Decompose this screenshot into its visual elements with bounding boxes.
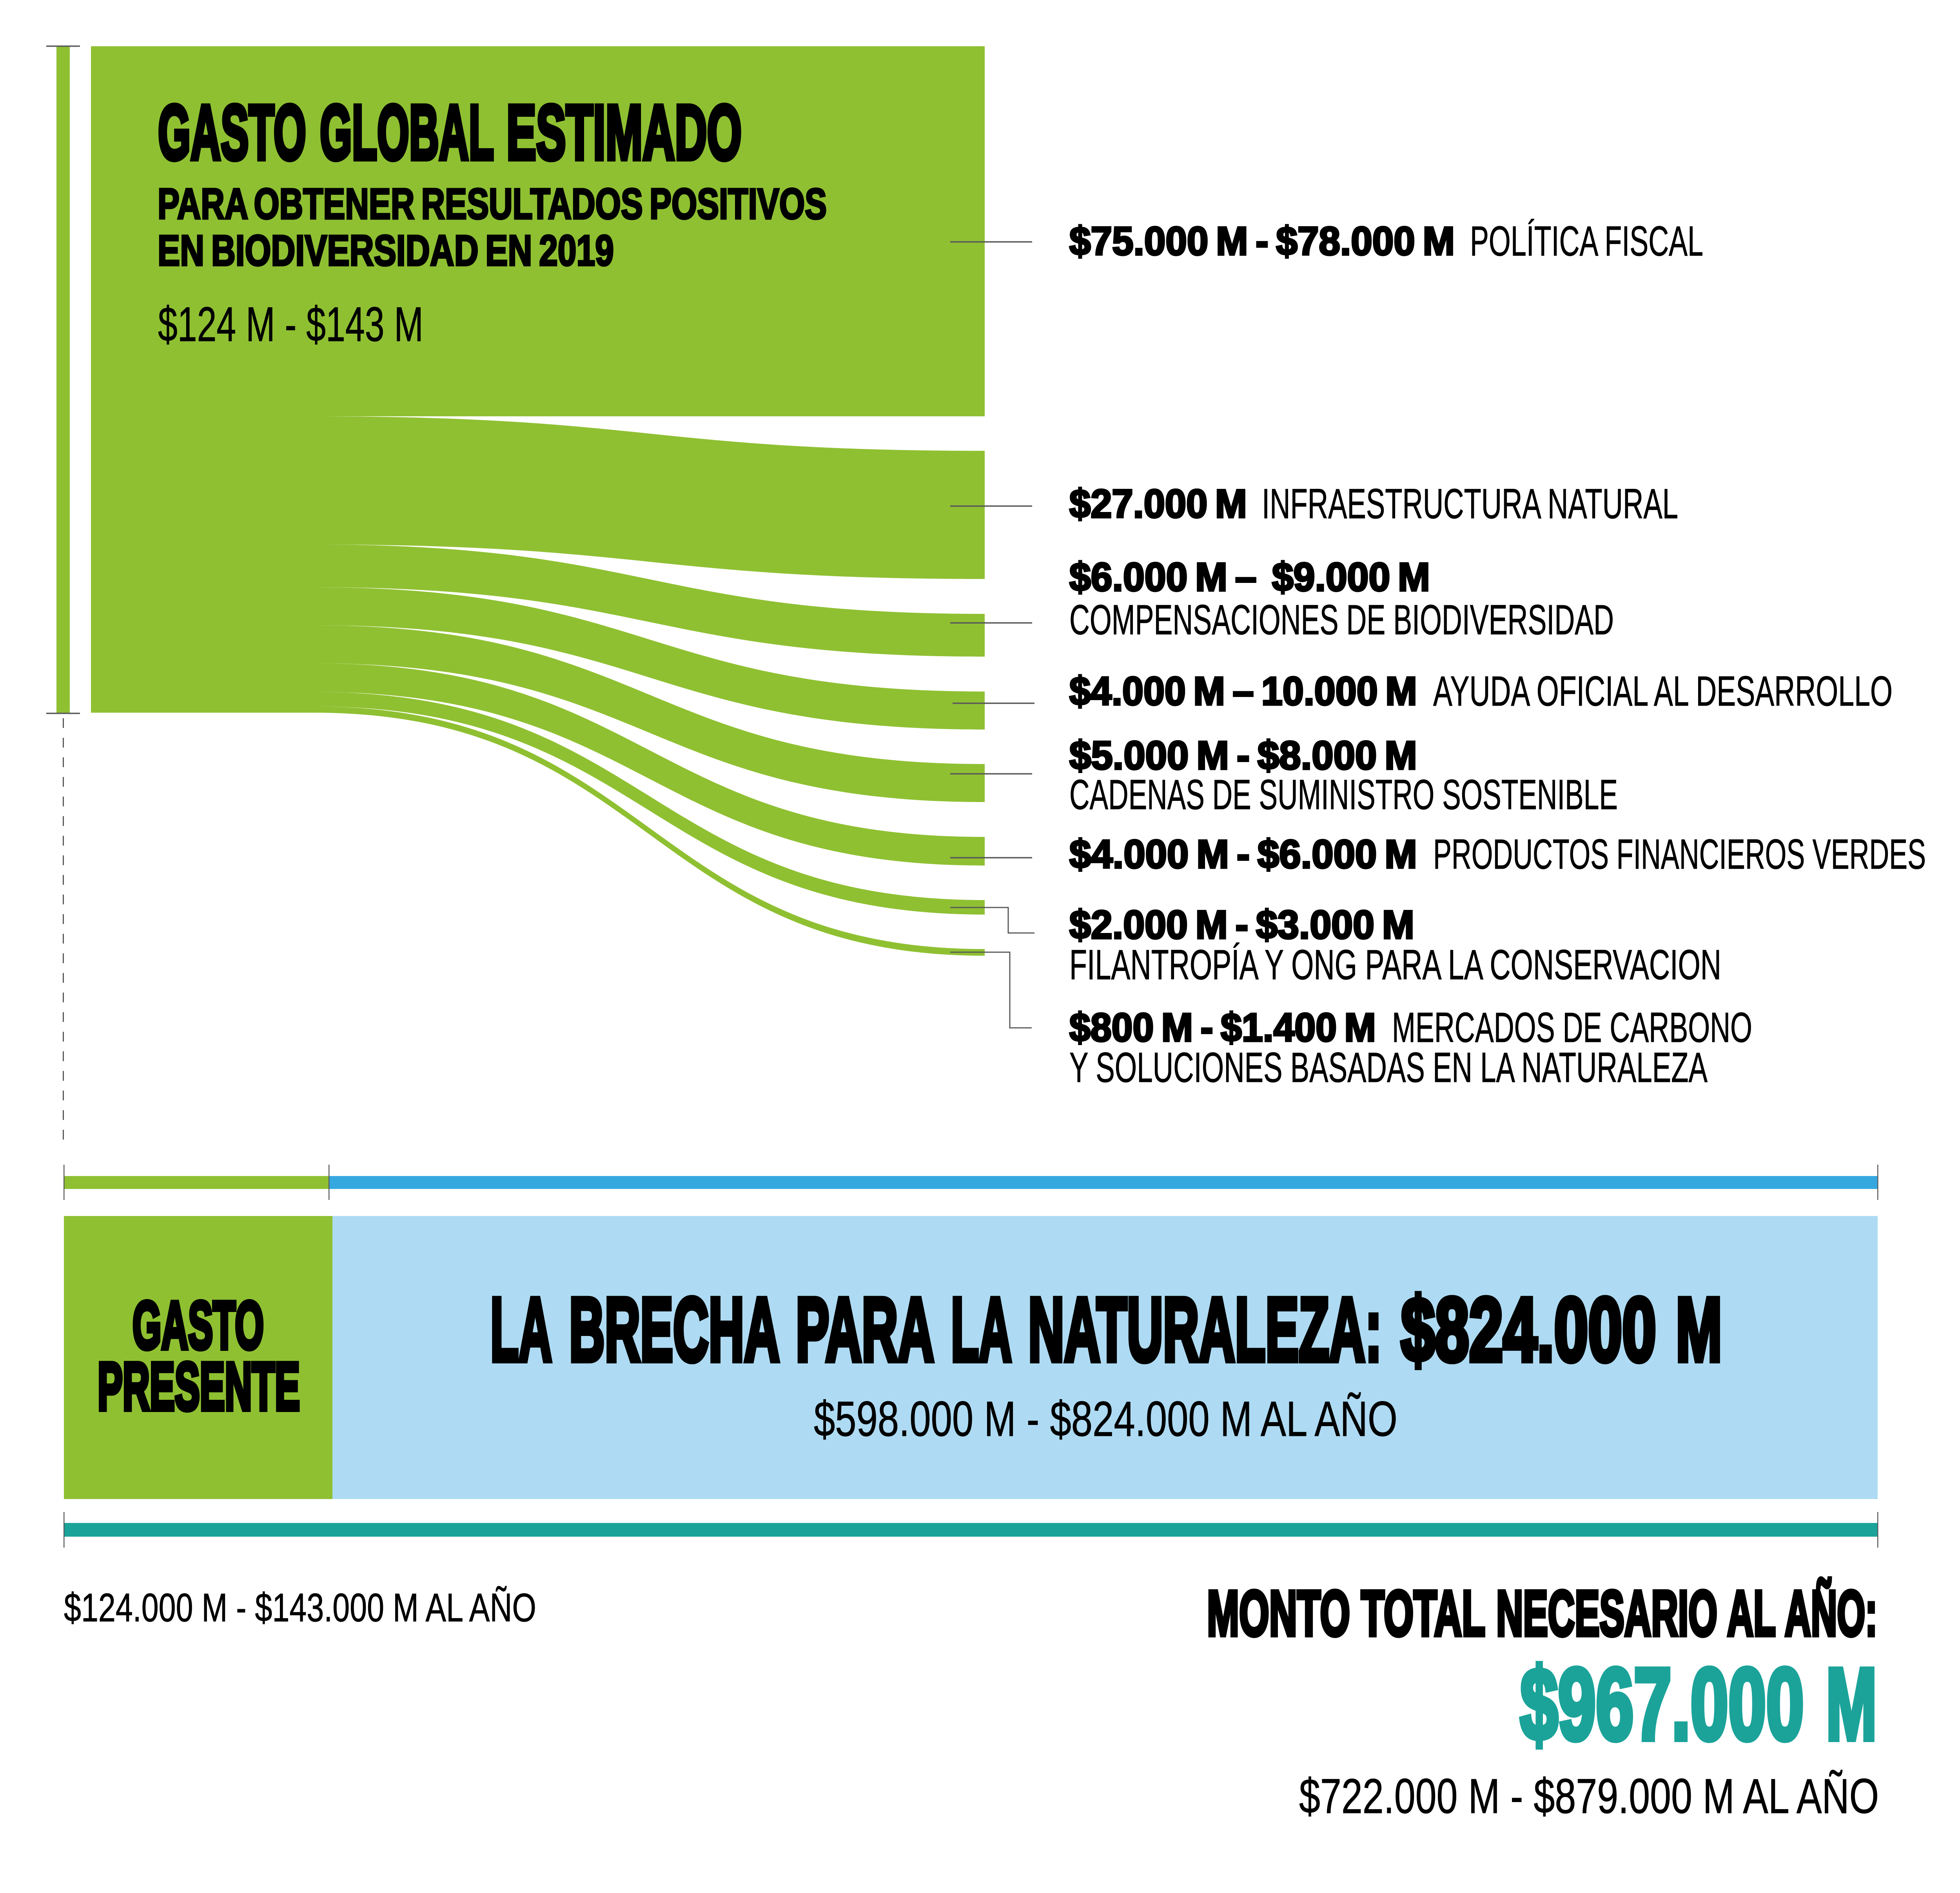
heading: gasto global estimado: GASTO <box>158 89 306 176</box>
subheading: positive biodiversity outcomes: PARA OBTENER RESULTADOS POSITIVOS <box>158 180 827 228</box>
panel: gasto presente <box>64 1216 332 1499</box>
label: official development aid: $4.000 M – 10.000 M <box>1069 669 1417 713</box>
label: natural infrastructure: INFRAESTRUCTURA NATURAL <box>1262 480 1678 527</box>
panel: la brecha para la naturaleza: NATURALEZA: <box>1028 1279 1382 1380</box>
scale bar: total amount <box>64 1512 1878 1548</box>
label: carbon markets and nature-based solutions: MERCADOS DE CARBONO <box>1392 1004 1752 1051</box>
heading: gasto global estimado <box>158 89 742 176</box>
heading: total amount needed per year: AL <box>1727 1577 1776 1649</box>
label: green financial products: $4.000 M - $6.000 M <box>1069 832 1417 877</box>
label: sustainable supply chains <box>1069 733 1618 818</box>
label: sustainable supply chains: CADENAS DE SUMINISTRO SOSTENIBLE <box>1069 771 1618 818</box>
bracket: estimated global spending scale <box>46 45 80 1147</box>
scale bar: present spending and gap <box>64 1165 1878 1200</box>
label: philanthropy and conservation NGOs: $2.000 M - $3.000 M <box>1069 902 1414 947</box>
heading: gasto global estimado: ESTIMADO <box>506 89 742 176</box>
label: green financial products <box>1069 830 1926 878</box>
panel: la brecha para la naturaleza: BRECHA <box>569 1279 780 1380</box>
sankey chart: spending by mechanism <box>91 46 985 956</box>
band: biodiversity offsets <box>314 544 985 657</box>
subheading: positive biodiversity outcomes <box>158 180 827 275</box>
subheading: positive biodiversity outcomes: EN BIODIVERSIDAD EN 2019 <box>158 227 614 275</box>
band: natural infrastructure <box>314 416 985 579</box>
panel: gasto presente: PRESENTE <box>98 1349 300 1424</box>
leader lines from bands to labels <box>950 242 1034 1028</box>
heading: gasto global estimado: GLOBAL <box>320 89 494 176</box>
heading: total amount needed per year: TOTAL <box>1361 1577 1485 1649</box>
label: biodiversity offsets <box>1069 555 1614 643</box>
label: natural infrastructure: $27.000 M <box>1069 481 1247 526</box>
label: carbon markets and nature-based solutions: $800 M - $1.400 M <box>1069 1005 1376 1050</box>
heading: total amount needed per year <box>1207 1577 1877 1649</box>
panel: la brecha para la naturaleza: $824.000 <box>1401 1279 1656 1380</box>
band: green financial products <box>314 663 985 866</box>
range: present spending per year: $124.000 M - $143.000 M AL AÑO <box>64 1585 536 1630</box>
band: carbon markets and nature-based solutions <box>314 706 985 956</box>
panel: la brecha para la naturaleza <box>332 1216 1878 1499</box>
big number: total amount: M <box>1826 1648 1877 1761</box>
label: carbon markets and nature-based solutions <box>1069 1004 1752 1091</box>
heading: total amount needed per year: MONTO <box>1207 1577 1350 1649</box>
band: philanthropy and conservation NGOs <box>314 692 985 915</box>
panel: la brecha para la naturaleza: $598.000 M - $824.000 M AL AÑO <box>814 1391 1397 1447</box>
band: official development aid <box>314 587 985 730</box>
panel: gasto presente: GASTO <box>132 1288 264 1363</box>
label: philanthropy and conservation NGOs <box>1069 902 1721 988</box>
panel: la brecha para la naturaleza: PARA <box>796 1279 934 1380</box>
label: fiscal policy: POLÍTICA FISCAL <box>1470 217 1703 265</box>
label: fiscal policy: $75.000 M - $78.000 M <box>1069 219 1455 263</box>
label: biodiversity offsets: COMPENSACIONES DE BIODIVERSIDAD <box>1069 596 1614 643</box>
panel: la brecha para la naturaleza: LA <box>951 1279 1012 1380</box>
label: biodiversity offsets: $6.000 M – $9.000 M <box>1069 555 1430 599</box>
band: sustainable supply chains <box>314 625 985 802</box>
panel: la brecha para la naturaleza: M <box>1676 1279 1722 1380</box>
range: global spending: $124 M - $143 M <box>158 298 423 352</box>
big number: total amount: $967.000 <box>1520 1648 1804 1761</box>
heading: total amount needed per year: AÑO: <box>1785 1577 1877 1649</box>
label: official development aid <box>1069 667 1893 715</box>
heading: total amount needed per year: NECESARIO <box>1496 1577 1717 1649</box>
band: main block and fiscal policy <box>91 46 985 713</box>
panel: la brecha para la naturaleza: LA <box>490 1279 552 1380</box>
label: natural infrastructure <box>1069 480 1678 527</box>
label: sustainable supply chains: $5.000 M - $8.000 M <box>1069 733 1417 778</box>
label: fiscal policy <box>1069 217 1703 265</box>
